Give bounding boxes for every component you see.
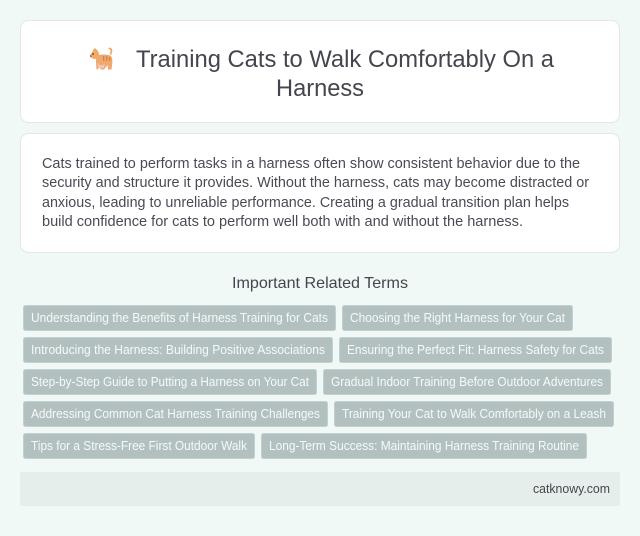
title text: Harness: [276, 75, 364, 102]
tag 5: [24, 370, 316, 394]
description line 3: anxious, leading to unreliable performance. Creating a gradual transition plan helps: [42, 195, 569, 211]
tag 6: [324, 370, 610, 394]
tag 10: Long-Term Success: Maintaining Harness Training Routine: [269, 438, 579, 453]
tag 1: [24, 306, 336, 330]
tag 5: Step-by-Step Guide to Putting a Harness on Your Cat: [31, 374, 309, 389]
footer source text: catknowy.com: [533, 481, 610, 496]
tag 4: Ensuring the Perfect Fit: Harness Safety for Cats: [347, 342, 604, 357]
panel: title card: [20, 20, 620, 122]
tag 4: [340, 338, 612, 362]
tag 7: [24, 402, 328, 426]
tag 9: [24, 434, 254, 458]
panel: description card: [20, 134, 620, 252]
heading: important related terms: Important Related Terms: [232, 275, 408, 292]
title text: Training Cats to Walk Comfortably On a: [136, 46, 555, 73]
tag 2: [342, 306, 572, 330]
tag 2: Choosing the Right Harness for Your Cat: [350, 310, 565, 325]
description line 4: build confidence for cats to perform well both with and without the harness.: [42, 214, 523, 230]
icon: orange cat: [90, 48, 112, 70]
tag 1: Understanding the Benefits of Harness Training for Cats: [31, 310, 328, 325]
tag 8: Training Your Cat to Walk Comfortably on a Leash: [342, 406, 606, 421]
tag 8: [334, 402, 614, 426]
panel: related term tags: [24, 306, 614, 458]
tag 3: Introducing the Harness: Building Positive Associations: [31, 342, 325, 357]
footer bar: [20, 472, 620, 506]
description line 2: security and structure it provides. Without the harness, cats may become distracted or: [42, 175, 589, 191]
tag 9: Tips for a Stress-Free First Outdoor Walk: [31, 438, 247, 453]
description line 1: Cats trained to perform tasks in a harness often show consistent behavior due to the: [42, 156, 580, 172]
tag 3: [24, 338, 332, 362]
tag 6: Gradual Indoor Training Before Outdoor Adventures: [331, 374, 603, 389]
tag 7: Addressing Common Cat Harness Training Challenges: [31, 406, 320, 421]
tag 10: [262, 434, 586, 458]
